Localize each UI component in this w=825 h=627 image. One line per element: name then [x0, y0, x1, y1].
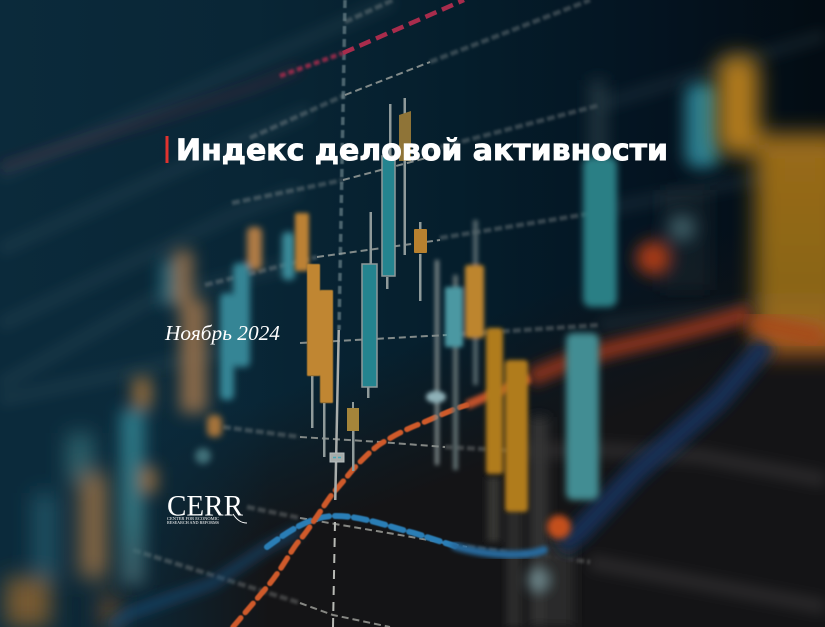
- orange trend line: [233, 313, 825, 627]
- sharp candles: [307, 98, 427, 500]
- title accent bar: [166, 136, 168, 163]
- blurred red dot on trend line: [547, 515, 571, 539]
- mid blurred candles: [195, 157, 617, 627]
- blurred verticals, bottom: [527, 417, 574, 627]
- blurred teal candle: [566, 333, 599, 500]
- logo: CERR: CERR: [167, 490, 243, 522]
- slightly blurred candles: [295, 213, 528, 512]
- logo: CERR: CENTER FOR ECONOMIC: [167, 517, 220, 521]
- logo: CERR: RESEARCH AND REFORMS: [167, 521, 219, 525]
- blurred blue trend line: [110, 343, 767, 627]
- far blurred candles, right: [590, 80, 720, 290]
- red dashed line: [0, 0, 464, 167]
- title: Индекс деловой активности: [176, 133, 668, 167]
- far blurred candles, lower left: [5, 433, 118, 627]
- far blurred candles, left: [120, 250, 207, 585]
- blue trend line: [267, 516, 544, 555]
- large blurred orange candles: [717, 55, 825, 355]
- subtitle: date: Ноябрь 2024: [164, 321, 280, 345]
